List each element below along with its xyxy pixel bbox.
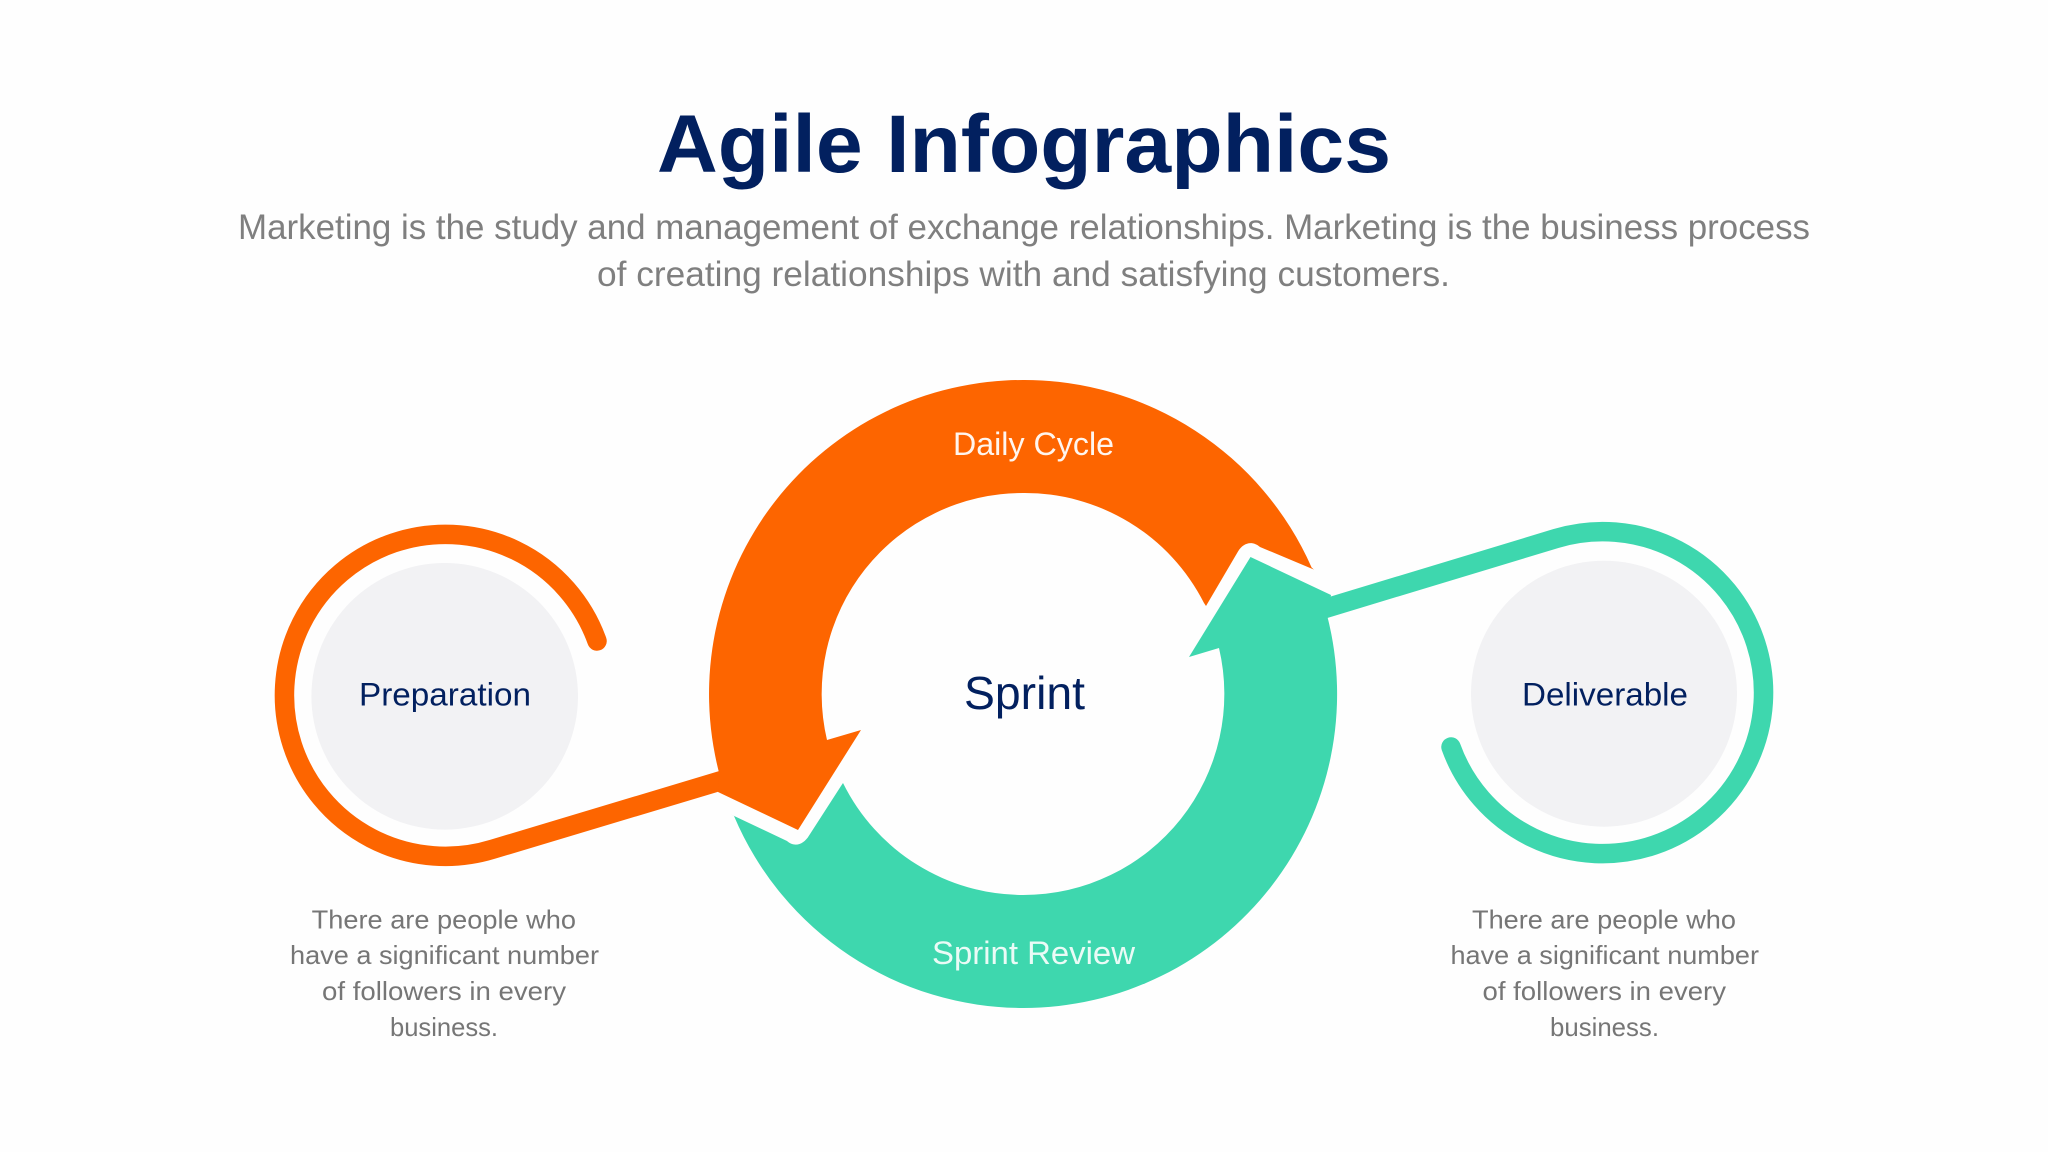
arrow: sprint review bbox=[731, 557, 1337, 1008]
text block: preparation description: have a significant number bbox=[290, 940, 599, 970]
connector ring: preparation bbox=[284, 534, 730, 856]
subtitle: of creating relationships with and satisfying customers. bbox=[597, 255, 1450, 294]
label: sprint review: Sprint Review bbox=[932, 935, 1136, 971]
label: sprint: Sprint bbox=[964, 667, 1085, 719]
text block: preparation description: business. bbox=[390, 1012, 498, 1042]
connector ring: deliverable bbox=[1320, 532, 1764, 854]
text block: preparation description: There are people who bbox=[312, 904, 576, 934]
label: daily cycle: Daily Cycle bbox=[953, 426, 1114, 462]
text block: preparation description: of followers in every bbox=[322, 976, 566, 1006]
text block: deliverable description: have a significant number bbox=[1450, 940, 1759, 970]
subtitle bbox=[238, 208, 1810, 294]
text block: deliverable description: business. bbox=[1550, 1012, 1659, 1042]
text block: deliverable description: of followers in every bbox=[1482, 976, 1726, 1006]
text block: deliverable description: There are people who bbox=[1472, 904, 1736, 934]
preparation circle bbox=[311, 563, 578, 830]
title: Agile Infographics bbox=[657, 99, 1391, 190]
label: deliverable: Deliverable bbox=[1522, 677, 1688, 713]
arrow: daily cycle bbox=[709, 380, 1314, 830]
label: preparation: Preparation bbox=[359, 677, 531, 713]
subtitle: Marketing is the study and management of exchange relationships. Marketing is the business process bbox=[238, 208, 1810, 247]
text block: preparation description bbox=[290, 904, 599, 1042]
text block: deliverable description bbox=[1450, 904, 1759, 1042]
deliverable circle bbox=[1471, 561, 1737, 827]
